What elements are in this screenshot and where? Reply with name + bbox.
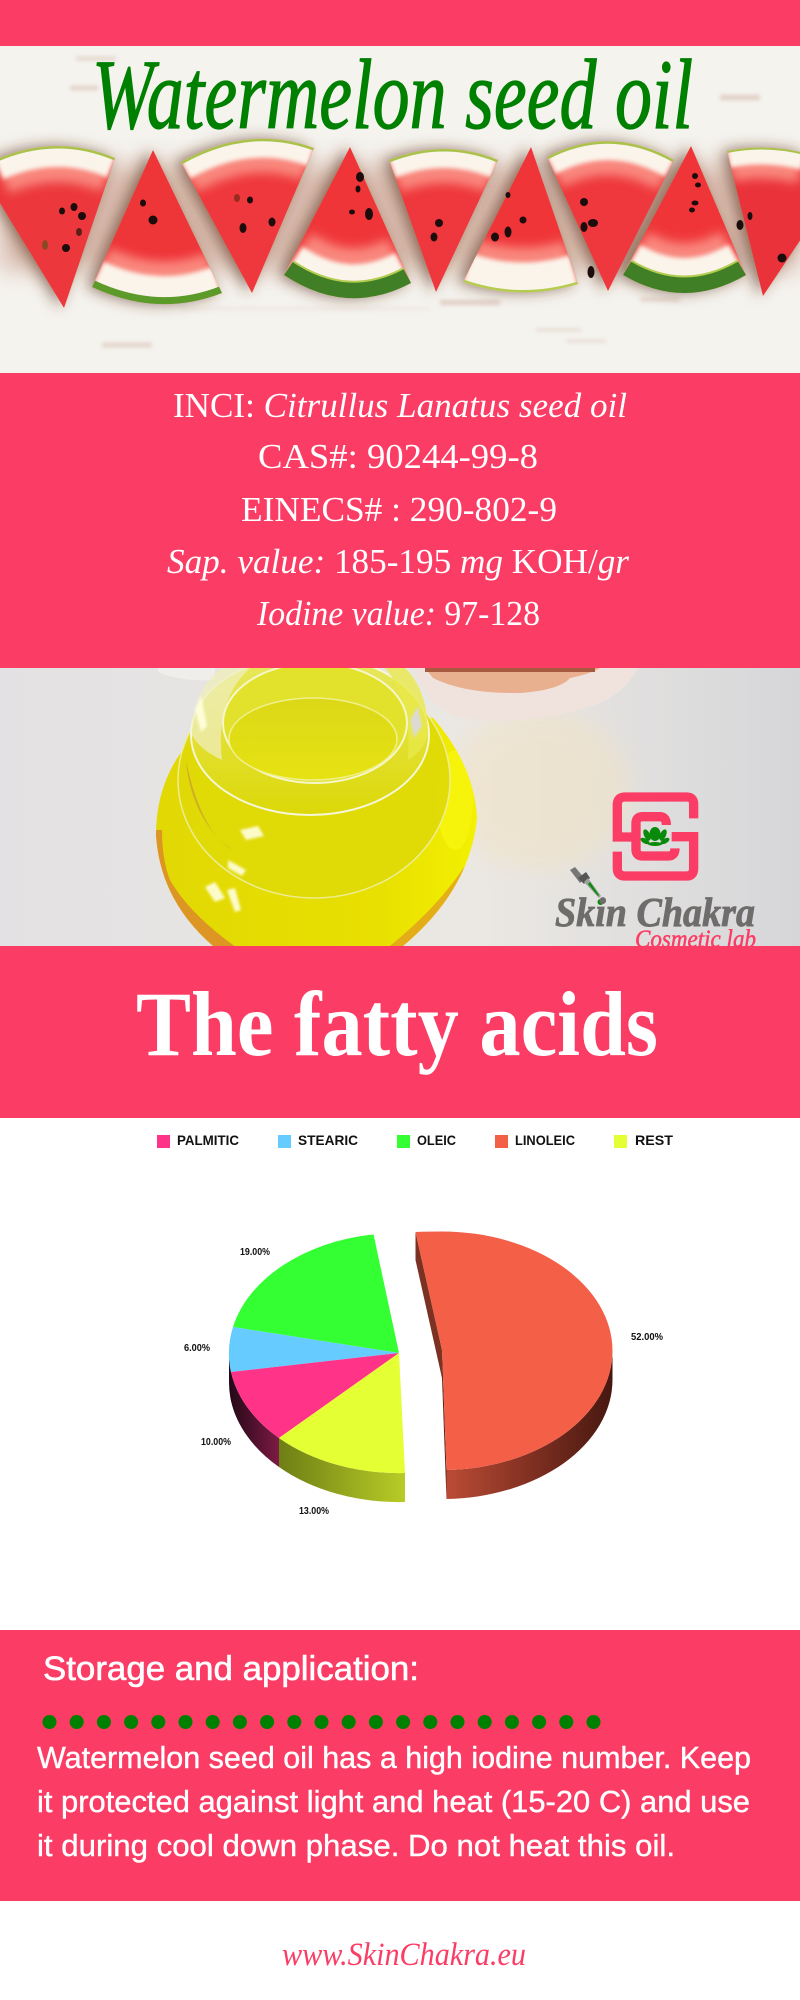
panel: fatty acids heading band — [0, 946, 800, 1118]
jar body — [156, 700, 477, 946]
body text: Watermelon seed oil has a high iodine number. Keep — [37, 1740, 751, 1775]
jar neck and rim — [191, 655, 429, 815]
chart legend: LINOLEIC — [515, 1132, 575, 1148]
value labels — [184, 1247, 663, 1517]
slice: linoleic 52% — [416, 1232, 612, 1470]
CAS line: CAS#: 90244-99-8 — [258, 437, 538, 476]
wordmark: Cosmetic lab: Cosmetic lab — [635, 926, 756, 953]
chart legend: OLEIC — [417, 1132, 456, 1148]
glass highlights — [195, 696, 422, 912]
photo: jar of yellow oil — [0, 655, 800, 950]
value labels: 19.00% — [240, 1247, 270, 1258]
website footer: www.SkinChakra.eu — [282, 1937, 526, 1973]
panel: oil properties — [0, 373, 800, 668]
Skin Chakra logo — [555, 797, 756, 953]
INCI line: INCI: Citrullus Lanatus seed oil — [173, 386, 627, 425]
EINECS line: EINECS# : 290-802-9 — [241, 490, 557, 529]
panel: storage and application — [0, 1630, 800, 1901]
saponification value line: Sap. value: 185-195 mg KOH/gr — [167, 542, 629, 581]
slice: oleic 19% — [233, 1234, 399, 1353]
icon: dropper — [570, 867, 604, 905]
chart legend — [157, 1132, 673, 1148]
watermelon seeds — [42, 172, 786, 278]
heading: The fatty acids: The fatty acids — [136, 973, 658, 1075]
hero photo: watermelon slices — [0, 46, 800, 373]
value labels: 52.00% — [631, 1332, 663, 1343]
slice: stearic 6% — [229, 1327, 399, 1372]
iodine value line: Iodine value: 97-128 — [256, 594, 540, 633]
slice: rest 13% — [279, 1353, 405, 1473]
body text: it protected against light and heat (15-20 C) and use — [37, 1784, 750, 1819]
value labels: 6.00% — [184, 1343, 210, 1354]
slice: palmitic 10% — [231, 1353, 399, 1438]
jar shoulder ring — [177, 710, 451, 899]
pie chart — [184, 1232, 663, 1517]
icon: green lotus — [639, 827, 671, 846]
top pink band — [0, 0, 800, 46]
wordmark: Skin Chakra: Skin Chakra — [555, 889, 755, 935]
watermelon slices row — [0, 125, 800, 315]
logo mark: SC monogram — [617, 797, 694, 876]
chart legend: STEARIC — [298, 1132, 358, 1148]
value labels: 13.00% — [299, 1506, 329, 1517]
oil surface — [229, 698, 397, 780]
body text — [37, 1740, 751, 1863]
green dotted divider — [42, 1715, 600, 1729]
value labels: 10.00% — [201, 1437, 231, 1448]
slice side faces — [229, 1232, 612, 1502]
chart legend: PALMITIC — [177, 1132, 239, 1148]
body text: it during cool down phase. Do not heat this oil. — [37, 1828, 675, 1863]
chart legend: REST — [635, 1132, 673, 1148]
heading: storage and application: Storage and application: — [43, 1650, 419, 1688]
